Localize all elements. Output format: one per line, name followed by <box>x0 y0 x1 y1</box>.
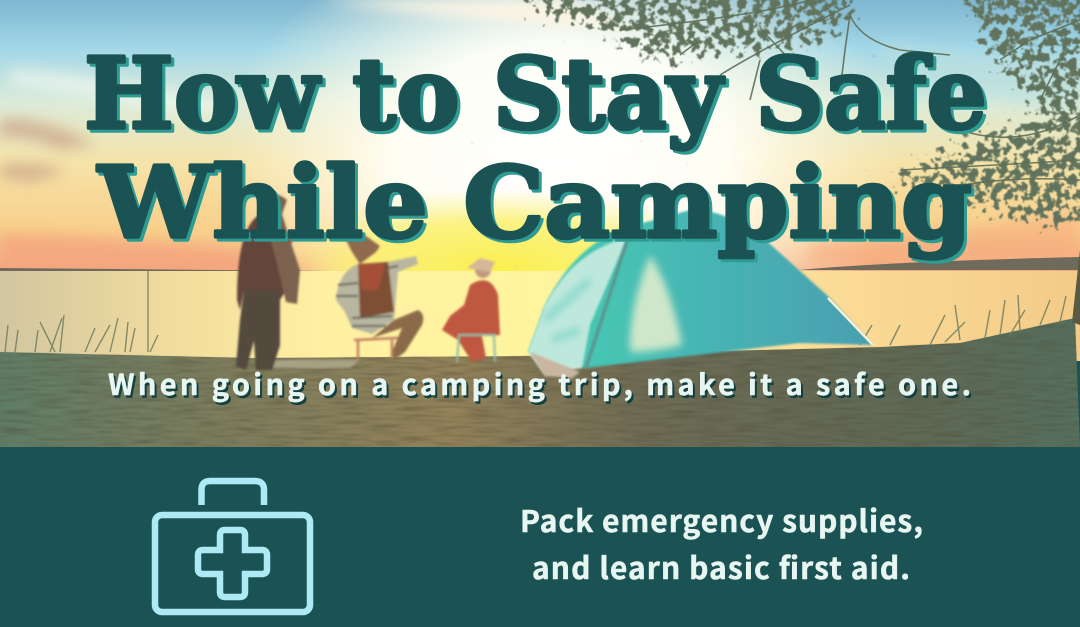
title shadow: How to Stay Safe <box>87 40 990 155</box>
bottom panel <box>0 447 1080 627</box>
kit handle <box>202 481 264 505</box>
title shadow: While Camping <box>100 149 975 264</box>
tree foliage <box>480 0 1080 232</box>
tent <box>528 210 873 378</box>
seated child <box>442 258 500 362</box>
seated man pointing <box>336 236 423 360</box>
far shoreline <box>0 257 1080 272</box>
tip text: Pack emergency supplies, <box>520 497 923 541</box>
title text <box>84 37 987 261</box>
title shadow <box>87 40 990 264</box>
sky <box>0 0 1080 272</box>
tree branches <box>620 0 1080 190</box>
icon: first aid kit <box>155 481 310 612</box>
ground <box>0 318 1080 447</box>
subtitle: When going on a camping trip, make it a safe one. <box>110 364 973 406</box>
standing adult with child <box>236 194 300 370</box>
title text: How to Stay Safe <box>84 37 987 152</box>
kit case <box>155 515 310 612</box>
tip text <box>520 497 923 588</box>
tree trunk <box>1072 250 1080 325</box>
sand patch <box>265 360 360 368</box>
title text: While Camping <box>97 146 972 261</box>
medical cross <box>198 530 267 597</box>
subtitle: When going on a camping trip, make it a safe one. <box>108 362 971 404</box>
grass tufts <box>5 270 1066 352</box>
title <box>84 37 990 264</box>
lake <box>0 271 1080 361</box>
photo: campers at sunset <box>0 0 1080 447</box>
tip text: and learn basic first aid. <box>532 544 910 588</box>
